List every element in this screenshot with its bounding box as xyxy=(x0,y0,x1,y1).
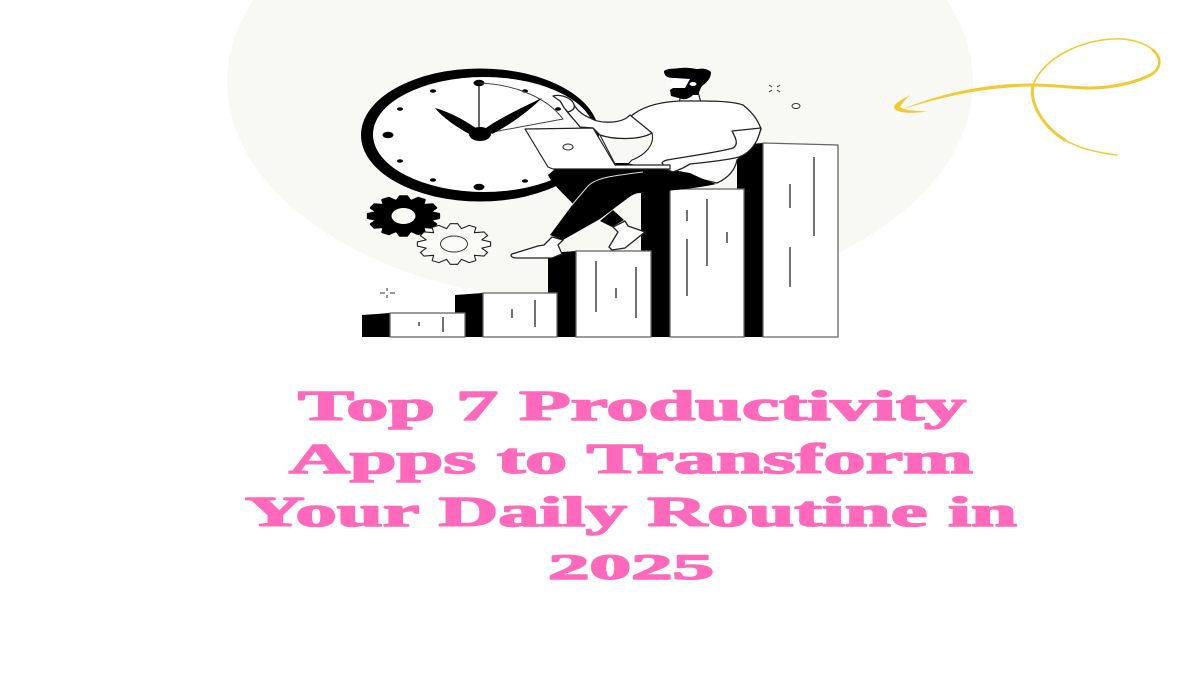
title xyxy=(245,384,1017,587)
icon: outline gear xyxy=(417,224,491,264)
icon: yellow looping arrow xyxy=(894,39,1159,155)
shirt torso xyxy=(628,101,761,183)
beard and hair xyxy=(664,68,711,99)
laptop xyxy=(525,128,670,169)
icon: black gear xyxy=(368,196,439,236)
background blob xyxy=(227,0,973,304)
gap under arm xyxy=(600,133,653,164)
bar chart: rising steps xyxy=(362,143,838,337)
front shoe xyxy=(511,237,563,258)
icon: wall clock xyxy=(361,68,599,202)
sparkle: upper right ticks xyxy=(769,85,780,92)
hand at clock xyxy=(553,95,574,112)
icon: small ring xyxy=(792,104,800,108)
title: 2025 xyxy=(548,547,714,587)
figure: man with laptop xyxy=(511,68,761,258)
title: Your Daily Routine in xyxy=(245,490,1017,536)
back shoe xyxy=(609,221,645,250)
pants and legs xyxy=(548,169,716,240)
title: Top 7 Productivity xyxy=(298,384,966,430)
ear xyxy=(690,82,696,86)
neck xyxy=(679,88,701,103)
raised arm xyxy=(566,101,652,139)
sparkle: lower left ticks xyxy=(380,288,395,298)
leg line xyxy=(571,172,643,206)
back leg xyxy=(600,210,624,227)
title: Apps to Transform xyxy=(289,437,973,483)
forearm resting xyxy=(662,128,761,172)
face xyxy=(669,76,691,90)
